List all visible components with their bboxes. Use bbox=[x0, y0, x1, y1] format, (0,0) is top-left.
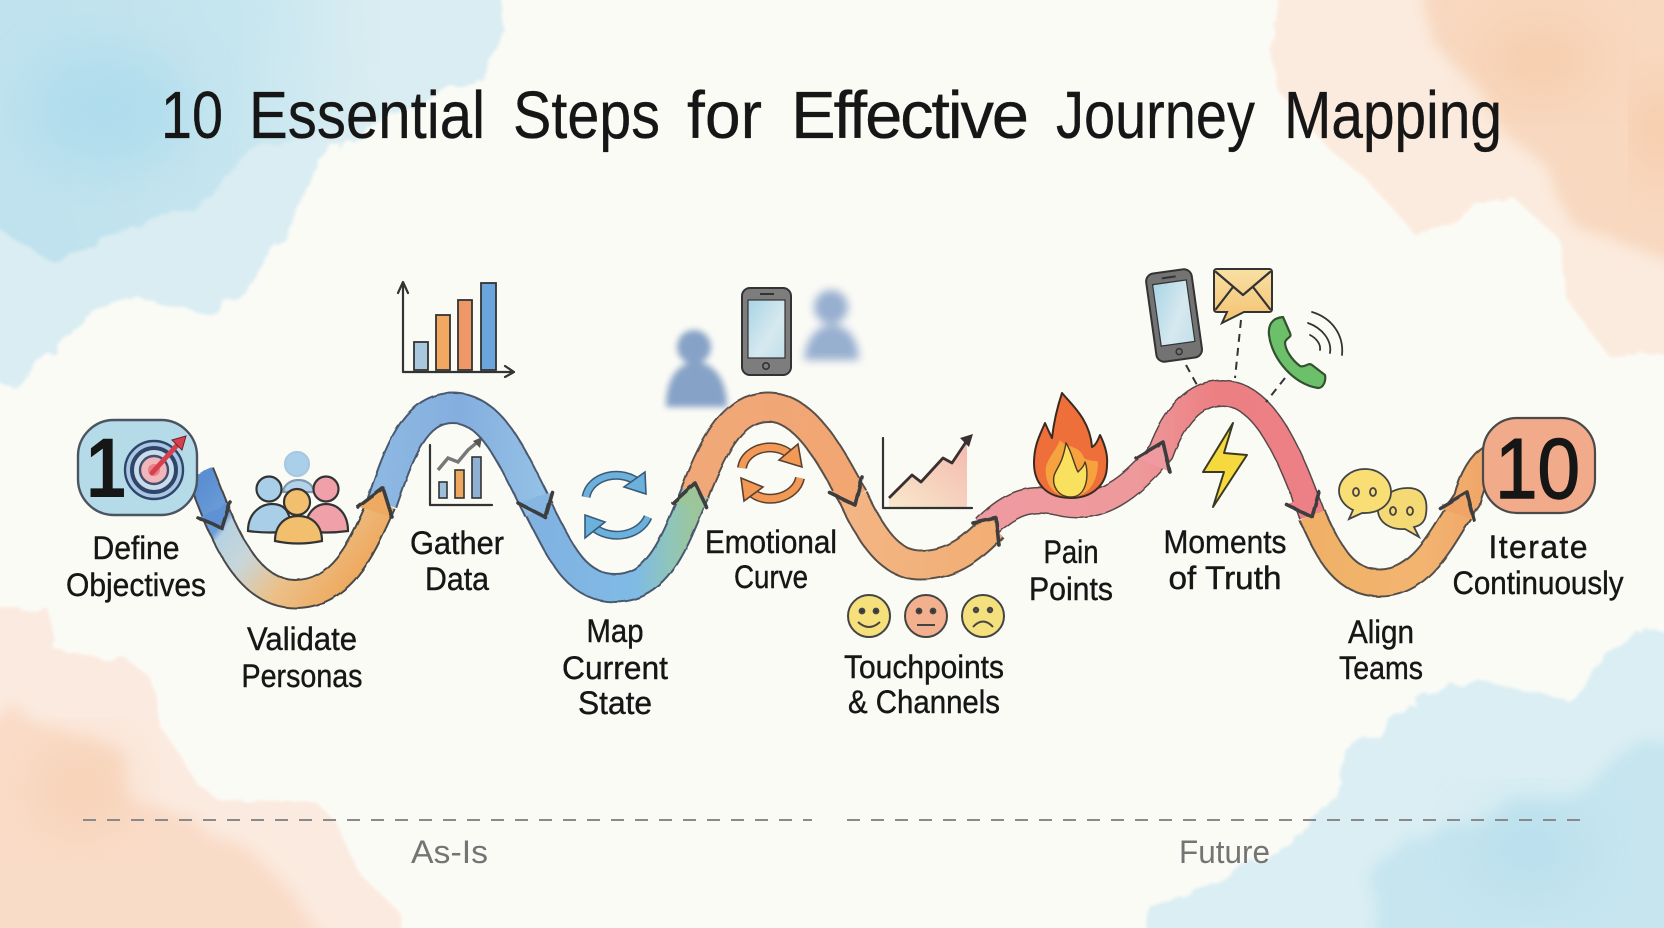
title: Steps bbox=[513, 78, 660, 153]
title: Mapping bbox=[1284, 78, 1502, 153]
wash: bottom-left orange bbox=[0, 610, 402, 928]
title: Journey bbox=[1056, 78, 1255, 153]
wash: bottom-right blue bbox=[1143, 625, 1664, 928]
label: Align Teams: Align bbox=[1348, 614, 1414, 650]
ribbon: steps 3 to 4 bbox=[382, 408, 539, 510]
ribbon: pain points and moments of truth bbox=[985, 393, 1312, 528]
label: Pain Points bbox=[1029, 534, 1113, 607]
label: Emotional Curve bbox=[705, 524, 837, 595]
ribbon: steps 4 to 5 bbox=[539, 493, 695, 588]
icon: flame bbox=[1034, 393, 1107, 498]
label: Map Current State: Map bbox=[586, 613, 644, 649]
icon: small data chart bbox=[430, 437, 492, 505]
label: Map Current State: State bbox=[578, 685, 652, 721]
icon: bar chart bbox=[398, 282, 514, 377]
icon: team chat bubbles bbox=[1339, 469, 1426, 537]
label: Validate Personas: Personas bbox=[242, 658, 362, 694]
direction arrowheads bbox=[198, 442, 1474, 545]
icon: lightning bolt bbox=[1203, 423, 1247, 507]
journey path ribbon bbox=[198, 393, 1492, 594]
icon: envelope speech bubble bbox=[1214, 269, 1272, 323]
icon: target and arrow bbox=[125, 436, 186, 499]
label: Define Objectives: Objectives bbox=[66, 567, 206, 603]
label: Emotional Curve: Curve bbox=[734, 559, 808, 595]
title: Effective bbox=[791, 78, 1029, 153]
icon: orange cycle arrows bbox=[741, 444, 802, 501]
icon: happy face bbox=[848, 595, 890, 637]
icon: green handset with signal bbox=[1269, 312, 1342, 388]
wash: top-left blue bbox=[0, 0, 505, 385]
title: for bbox=[687, 78, 762, 153]
badge: step 10: 10 bbox=[1495, 422, 1580, 517]
connector dashes to channels bbox=[1186, 320, 1285, 402]
label: Pain Points: Pain bbox=[1044, 534, 1098, 570]
label: Iterate Continuously bbox=[1452, 529, 1624, 601]
label: Map Current State bbox=[562, 613, 668, 721]
icon: smartphone bbox=[742, 288, 791, 375]
timeline dashed divider bbox=[83, 819, 1589, 821]
label: Touchpoints & Channels: & Channels bbox=[848, 684, 1000, 720]
label: Define Objectives: Define bbox=[92, 530, 180, 566]
label: Moments of Truth: of Truth bbox=[1168, 560, 1282, 596]
icon: rising emotional chart bbox=[883, 434, 973, 508]
label: Align Teams: Teams bbox=[1339, 650, 1423, 686]
label: Validate Personas: Validate bbox=[247, 621, 357, 657]
title: 10 bbox=[161, 78, 223, 153]
label: Gather Data: Gather bbox=[410, 525, 504, 561]
label: Iterate Continuously: Iterate bbox=[1488, 529, 1588, 565]
label: Future: Future bbox=[1179, 834, 1270, 870]
ribbon: steps 1 to 2 bbox=[200, 473, 382, 594]
ribbon: emotional curve crest bbox=[695, 407, 853, 497]
icon: tilted phone bbox=[1145, 268, 1203, 363]
icon: neutral face bbox=[905, 595, 947, 637]
label: Map Current State: Current bbox=[562, 650, 668, 686]
title: Essential bbox=[249, 78, 485, 153]
label: Define Objectives bbox=[66, 530, 206, 603]
badge: step 1 with target bbox=[78, 420, 197, 515]
icon: sad face bbox=[962, 595, 1004, 637]
label: Validate Personas bbox=[242, 621, 362, 694]
label: Touchpoints & Channels bbox=[844, 649, 1004, 720]
ribbon: touchpoints trough bbox=[853, 497, 993, 565]
label: Iterate Continuously: Continuously bbox=[1452, 565, 1624, 601]
ribbon: align teams trough bbox=[1312, 457, 1492, 583]
label: As-Is: As-Is bbox=[411, 834, 488, 870]
icon: left blurred person bbox=[666, 330, 727, 407]
label: Gather Data bbox=[410, 525, 504, 597]
icon: personas group bbox=[248, 452, 348, 544]
label: Gather Data: Data bbox=[425, 561, 489, 597]
wash: top-right orange bbox=[1270, 0, 1664, 358]
icon: blue cycle arrows bbox=[585, 472, 648, 538]
title bbox=[161, 78, 1502, 153]
icon: right blurred person bbox=[804, 290, 859, 360]
label: Moments of Truth bbox=[1164, 524, 1286, 596]
label: Align Teams bbox=[1339, 614, 1423, 686]
label: Pain Points: Points bbox=[1029, 571, 1113, 607]
label: Touchpoints & Channels: Touchpoints bbox=[844, 649, 1004, 685]
icon: emotion faces bbox=[848, 595, 1004, 637]
label: Emotional Curve: Emotional bbox=[705, 524, 837, 560]
badge: step 1 with target: 1 bbox=[86, 421, 126, 515]
label: Moments of Truth: Moments bbox=[1164, 524, 1286, 560]
